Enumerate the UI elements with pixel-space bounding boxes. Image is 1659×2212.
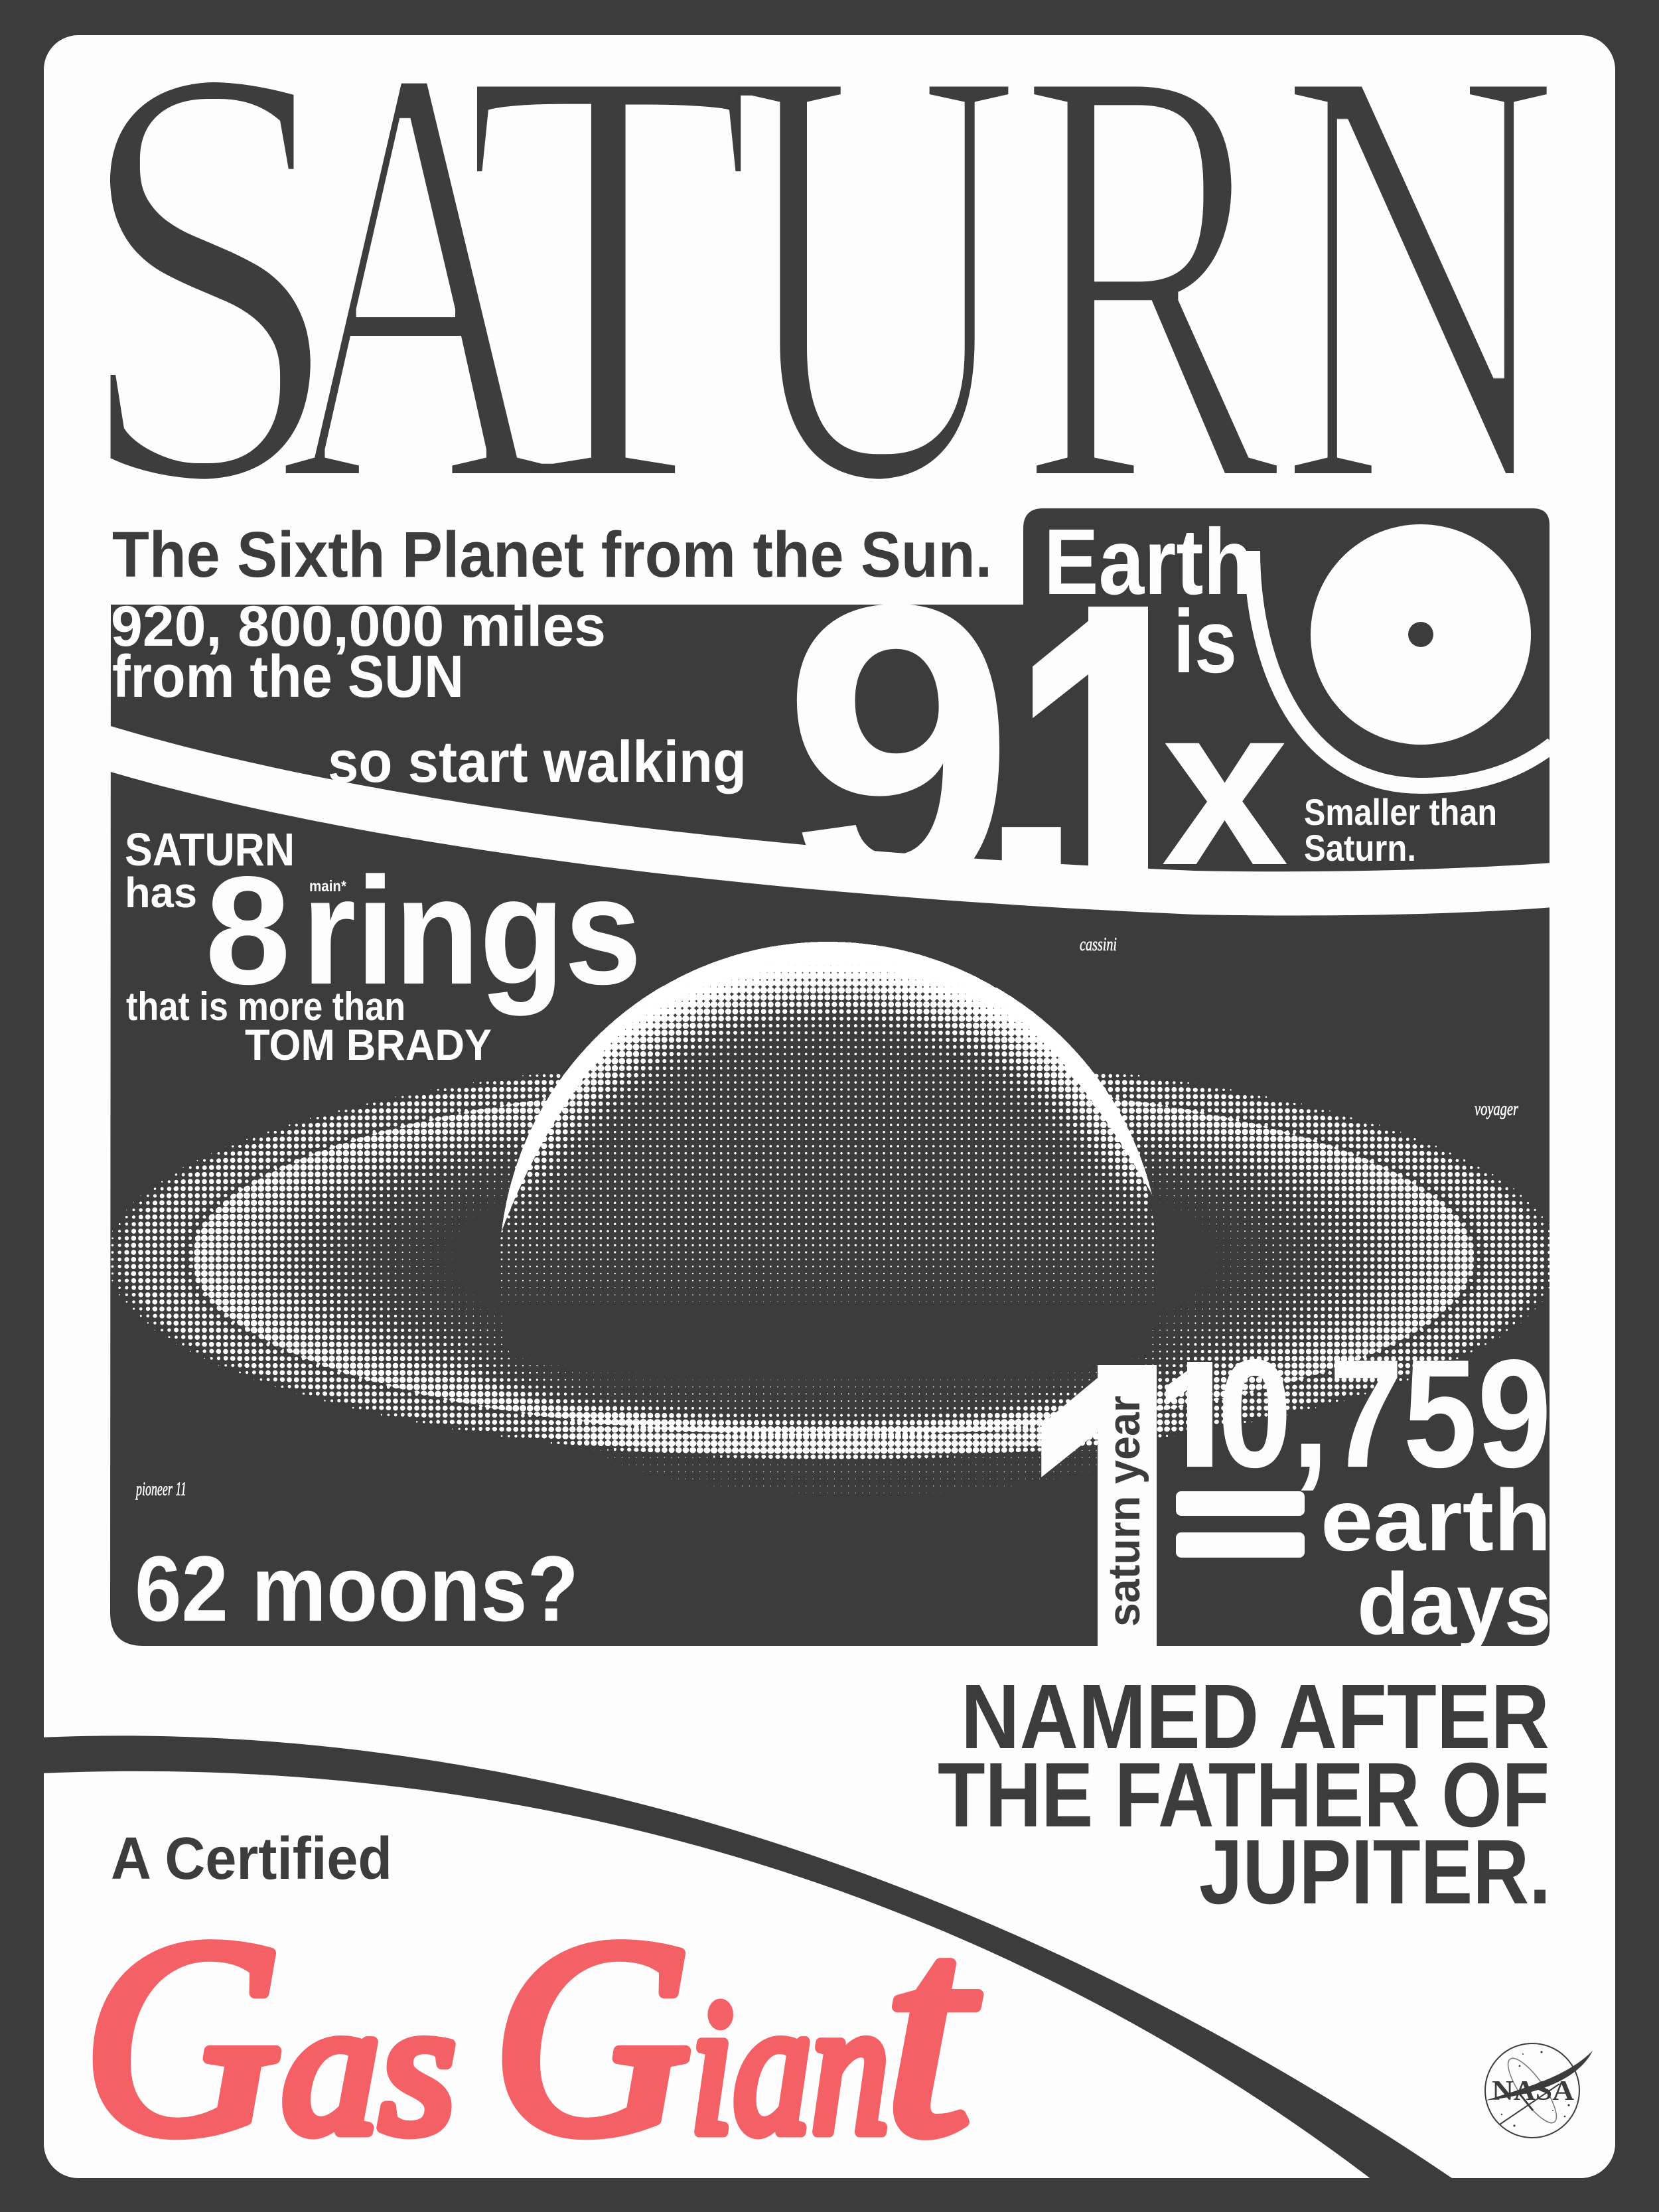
heading: sixth planet: The Sixth Planet from the Sun. bbox=[112, 518, 992, 591]
number: 10,759: 1 bbox=[1155, 1330, 1241, 1524]
text: earth days: earth bbox=[1321, 1471, 1551, 1569]
text block: distance from the sun bbox=[111, 595, 747, 794]
lit limb bbox=[502, 942, 1155, 1232]
text block: 8 main rings: TOM BRADY bbox=[245, 1020, 492, 1069]
big number: 9.1x bbox=[796, 605, 1287, 869]
text block: 8 main rings: rings bbox=[302, 846, 642, 1016]
text block: 8 main rings: that is more than bbox=[126, 984, 405, 1029]
text block: 8 main rings: main* bbox=[309, 877, 346, 895]
script heading: gas giant: G bbox=[492, 1880, 691, 2193]
text block: 8 main rings: SATURN bbox=[125, 824, 295, 875]
text block: earth is: is bbox=[1173, 591, 1237, 692]
script heading: gas giant: G bbox=[83, 1880, 282, 2193]
number: 10,759: 0,759 bbox=[1218, 1328, 1551, 1500]
bright crescents bbox=[502, 986, 664, 1231]
text block: smaller than saturn: Saturn. bbox=[1304, 827, 1416, 869]
halftone image: saturn and rings bbox=[111, 929, 1550, 1526]
text block: named after: JUPITER. bbox=[1199, 1821, 1551, 1923]
text block: 8 main rings: 8 bbox=[205, 845, 291, 1017]
text: a certified: A Certified bbox=[111, 1826, 392, 1892]
text block: distance from the sun: 920, 800,000 miles bbox=[111, 595, 606, 658]
panel: dark saturn panel bbox=[110, 508, 1550, 1646]
script heading: gas giant bbox=[83, 1866, 982, 2197]
dark curved band bbox=[40, 1735, 1460, 2183]
script heading: gas giant: as bbox=[282, 1960, 456, 2174]
ring shadow bbox=[458, 1281, 1201, 1434]
icon: equals sign bbox=[1176, 1491, 1305, 1558]
big numeral 1 with saturn year bbox=[1041, 1365, 1157, 1646]
script heading: gas giant: t bbox=[884, 1866, 982, 2197]
title bbox=[72, 0, 1561, 608]
text block: named after bbox=[938, 1666, 1551, 1923]
text block: smaller than saturn: Smaller than bbox=[1304, 791, 1497, 833]
text: earth days: days bbox=[1357, 1555, 1551, 1653]
text block: 8 main rings: has bbox=[125, 869, 197, 917]
text block: earth is bbox=[1044, 509, 1254, 692]
planet body bbox=[499, 942, 1157, 1600]
big number: 9.1x: x bbox=[1161, 658, 1290, 913]
big numeral 1 with saturn year: 1 bbox=[1015, 1264, 1227, 1809]
icon: nasa logo bbox=[1485, 2043, 1593, 2138]
text: earth days bbox=[1325, 1487, 1548, 1646]
big number: 9.1x: 9 bbox=[782, 518, 1015, 985]
text block: 8 main rings bbox=[125, 824, 642, 1069]
number: 10,759 bbox=[1165, 1359, 1547, 1491]
faint outer halo under the front rings bbox=[531, 1367, 1194, 1507]
big numeral 1 with saturn year: saturn year bbox=[1099, 1396, 1149, 1627]
big number: 9.1x: . bbox=[974, 511, 1090, 978]
text block: moons: 62 moons? bbox=[135, 1536, 579, 1641]
icon: nasa logo: NASA bbox=[1492, 2076, 1575, 2106]
text block: named after: NAMED AFTER bbox=[961, 1666, 1550, 1768]
white wave band bbox=[106, 725, 1553, 916]
text block: smaller than saturn bbox=[1304, 791, 1497, 869]
text block: earth is: Earth bbox=[1044, 509, 1254, 614]
icon: earth circle bbox=[1311, 524, 1531, 745]
big number: 9.1x: 1 bbox=[1007, 509, 1218, 1044]
text block: distance from the sun: from the SUN bbox=[112, 644, 464, 710]
rings bbox=[103, 1055, 1563, 1460]
arc around earth bbox=[1252, 551, 1553, 786]
label: voyager: voyager bbox=[1475, 1099, 1518, 1120]
script heading: gas giant: ian bbox=[690, 1960, 889, 2174]
text block: distance from the sun: so start walking bbox=[328, 729, 747, 794]
label: pioneer 11: pioneer 11 bbox=[135, 1478, 186, 1500]
text block: named after: THE FATHER OF bbox=[938, 1744, 1550, 1846]
label: cassini: cassini bbox=[1080, 934, 1117, 955]
